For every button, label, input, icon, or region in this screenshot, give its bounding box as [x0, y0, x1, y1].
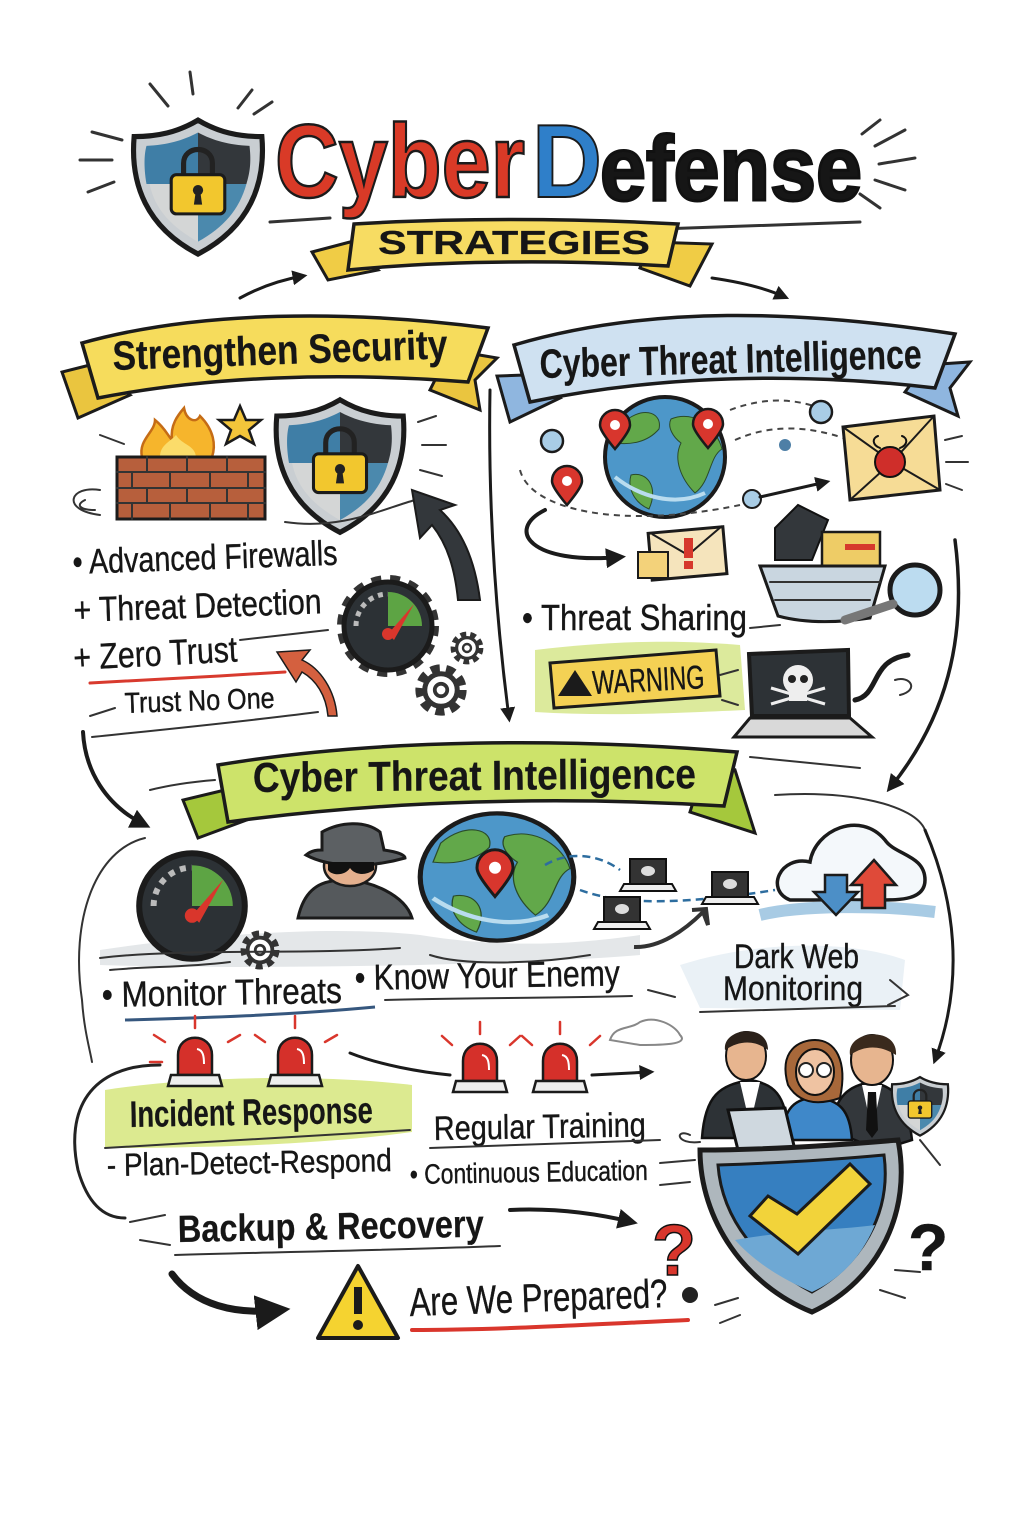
title: D — [532, 104, 602, 220]
title: efense — [600, 118, 862, 220]
panel: threat intelligence top — [497, 315, 970, 788]
text: dark web monitoring: Dark Web — [734, 938, 859, 976]
sirens right — [442, 1022, 600, 1092]
icon: small cloud — [610, 1020, 682, 1045]
icon: warning triangle — [318, 1266, 398, 1338]
bullet: monitor threats: • Monitor Threats — [101, 970, 342, 1015]
icon: gauge — [139, 853, 245, 959]
icon: gears — [420, 634, 481, 711]
icon: large check shield — [700, 1140, 901, 1312]
arrow: title right — [712, 278, 785, 297]
icon: alert envelopes — [638, 526, 727, 580]
person: left — [702, 1031, 790, 1138]
banner: strategies — [312, 220, 712, 286]
text: regular training: Regular Training — [433, 1106, 646, 1148]
icon: network nodes — [520, 401, 850, 516]
banner: strategies: STRATEGIES — [378, 224, 650, 261]
arrow: swoosh to envelope — [527, 510, 620, 558]
bullet: know your enemy: • Know Your Enemy — [354, 952, 620, 998]
arrow: left sweep — [75, 1065, 160, 1218]
wash: ground shading — [100, 931, 640, 967]
bullet: advanced firewalls: • Advanced Firewalls — [72, 534, 338, 582]
arrow: left to lower panel — [83, 732, 145, 825]
banner: lower — [183, 743, 755, 838]
bullet: threat detection: + Threat Detection — [73, 582, 322, 630]
banner: cyber threat intelligence: Cyber Threat Intelligence — [539, 331, 922, 387]
arrow: right side down — [890, 540, 959, 788]
icon: firewall — [74, 406, 265, 519]
title: Cyber — [275, 104, 525, 220]
icon: skull laptop — [720, 650, 911, 737]
text block: incident response — [105, 1078, 412, 1148]
text block: incident response: Incident Response — [129, 1090, 373, 1135]
arrow: sirens to team — [350, 1053, 650, 1075]
warning sign: WARNING — [591, 658, 705, 701]
icon: location pins — [552, 409, 723, 505]
banner: lower: Cyber Threat Intelligence — [253, 750, 696, 801]
text: dark web monitoring: Monitoring — [723, 970, 863, 1008]
text: dark web monitoring — [680, 938, 908, 1012]
icon: connected laptops — [545, 856, 775, 947]
icon: cloud arrows — [760, 825, 935, 915]
text: are we prepared: Are We Prepared? — [409, 1272, 668, 1325]
icon: globe with pin — [420, 813, 574, 941]
icon: gauge — [340, 578, 436, 674]
person: woman — [780, 1040, 852, 1140]
arrow: red — [277, 650, 337, 716]
icon: laptop — [728, 1108, 795, 1150]
arrow: large up — [412, 490, 480, 600]
icon: title shield — [134, 120, 262, 254]
text: continuous education: • Continuous Education — [410, 1155, 648, 1190]
banner: cyber threat intelligence — [497, 315, 970, 422]
text: backup and recovery: Backup & Recovery — [177, 1204, 484, 1251]
sirens left — [150, 1016, 337, 1086]
panel: cyber threat intelligence lower — [79, 743, 935, 1062]
team — [680, 1031, 948, 1323]
icon: hacker — [298, 824, 412, 918]
title — [80, 72, 915, 254]
icon: dark question mark: ? — [908, 1210, 948, 1284]
arrow: title left — [240, 276, 303, 298]
text: trust no one: Trust No One — [124, 683, 275, 720]
person: right — [830, 1034, 912, 1150]
banner: strengthen security: Strengthen Security — [112, 321, 448, 379]
icon: red question mark: ? — [652, 1211, 696, 1291]
icon: gear — [244, 934, 276, 966]
bullet: zero trust: + Zero Trust — [72, 628, 238, 678]
icon: shield — [276, 400, 404, 532]
bullet: threat sharing: • Threat Sharing — [522, 597, 747, 638]
icon: folder tray and magnifier — [760, 505, 940, 622]
arrow: dark lower left — [172, 1274, 280, 1311]
arrow: to shield — [510, 1210, 632, 1222]
warning sign — [535, 642, 745, 714]
icon: malware envelope — [843, 416, 940, 500]
arrow: right to team — [925, 830, 953, 1060]
banner: strengthen security — [62, 316, 497, 418]
arrow: center down — [490, 390, 509, 718]
icon: small shield — [892, 1077, 948, 1136]
panel: strengthen security — [62, 316, 497, 737]
text: plan detect respond: - Plan-Detect-Respond — [106, 1142, 392, 1183]
icon: globe — [605, 397, 725, 517]
